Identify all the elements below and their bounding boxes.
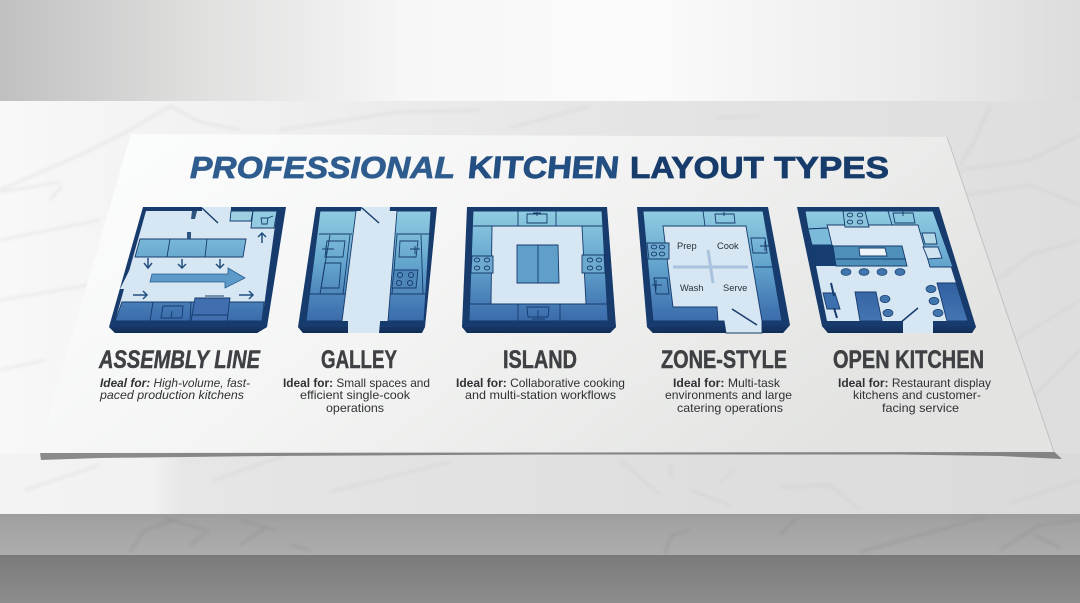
island floor plan xyxy=(462,207,616,333)
description: zone-style: catering operations xyxy=(677,401,783,415)
assembly line floor plan xyxy=(109,207,286,333)
description: galley xyxy=(283,376,430,415)
open kitchen floor plan xyxy=(797,207,976,333)
description: zone-style xyxy=(665,376,792,415)
panel: open kitchen xyxy=(797,207,991,415)
zone labels xyxy=(677,241,747,293)
description: open kitchen: kitchens and customer- xyxy=(853,388,981,402)
description: open kitchen xyxy=(838,376,991,415)
title: PROFESSIONAL xyxy=(190,150,455,185)
description: assembly line: paced production kitchens xyxy=(99,388,244,402)
panel: assembly line xyxy=(98,207,286,402)
paper sheet xyxy=(38,134,1054,453)
description: open kitchen: Ideal for: Restaurant display xyxy=(838,376,991,390)
background: area below counter xyxy=(0,555,1080,603)
panel: zone-style xyxy=(637,207,792,415)
zone labels: Cook xyxy=(717,241,739,251)
description: island xyxy=(456,376,625,402)
title xyxy=(190,150,889,185)
bar stools xyxy=(841,269,943,317)
heading: island: ISLAND xyxy=(503,346,577,374)
sink xyxy=(161,306,183,318)
paper right edge shade xyxy=(947,137,1054,452)
paper shadow xyxy=(40,452,1062,460)
stoves xyxy=(471,255,605,273)
center island xyxy=(517,245,559,283)
flow arrow xyxy=(150,268,245,288)
heading: assembly line: ASSEMBLY LINE xyxy=(98,346,261,374)
background: counter front edge xyxy=(0,514,1080,555)
zone labels: Serve xyxy=(723,283,747,293)
heading: galley: GALLEY xyxy=(321,346,397,374)
description: assembly line xyxy=(99,376,250,402)
background: marble counter top xyxy=(0,101,1080,514)
description: island: Ideal for: Collaborative cooking xyxy=(456,376,625,390)
description: galley: Ideal for: Small spaces and xyxy=(283,376,430,390)
stove xyxy=(392,270,418,288)
description: galley: operations xyxy=(326,401,384,415)
zone labels: Wash xyxy=(680,283,703,293)
range xyxy=(191,298,230,321)
description: assembly line: Ideal for: High-volume, fast- xyxy=(100,376,250,390)
panel: galley xyxy=(283,207,437,415)
panel: island xyxy=(456,207,625,402)
title: KITCHEN xyxy=(466,150,621,185)
heading: zone-style: ZONE-STYLE xyxy=(661,346,787,374)
background: wall xyxy=(0,0,1080,101)
description: zone-style: environments and large xyxy=(665,388,792,402)
title: TYPES xyxy=(774,150,889,185)
description: open kitchen: facing service xyxy=(882,401,959,415)
heading: open kitchen: OPEN KITCHEN xyxy=(833,346,984,374)
galley floor plan xyxy=(298,207,437,333)
title: LAYOUT xyxy=(630,150,764,185)
description: galley: efficient single-cook xyxy=(300,388,411,402)
zone-style floor plan xyxy=(637,207,790,333)
zone labels: Prep xyxy=(677,241,697,251)
description: island: and multi-station workflows xyxy=(465,388,616,402)
description: zone-style: Ideal for: Multi-task xyxy=(673,376,781,390)
